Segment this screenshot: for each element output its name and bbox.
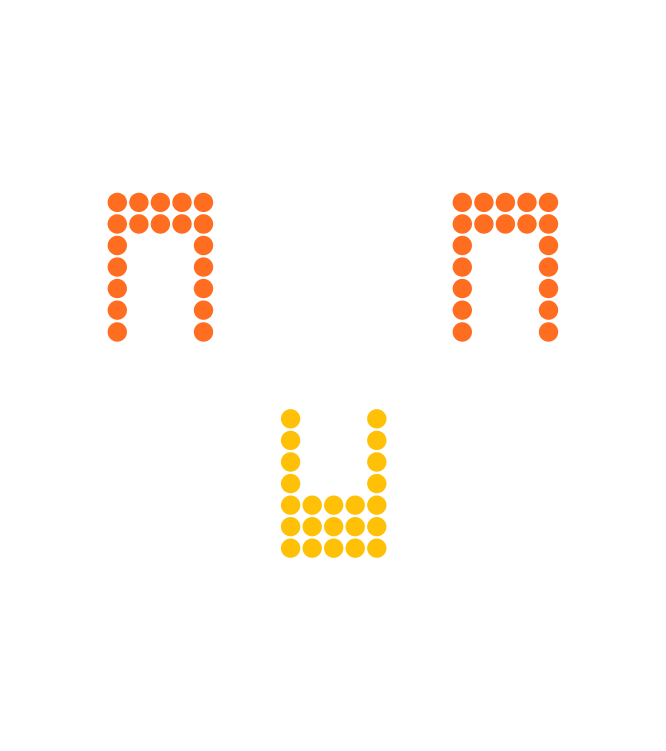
bottom yellow dot glyph (281, 409, 386, 558)
left orange dot glyph (108, 193, 213, 342)
right orange dot glyph (453, 193, 558, 342)
